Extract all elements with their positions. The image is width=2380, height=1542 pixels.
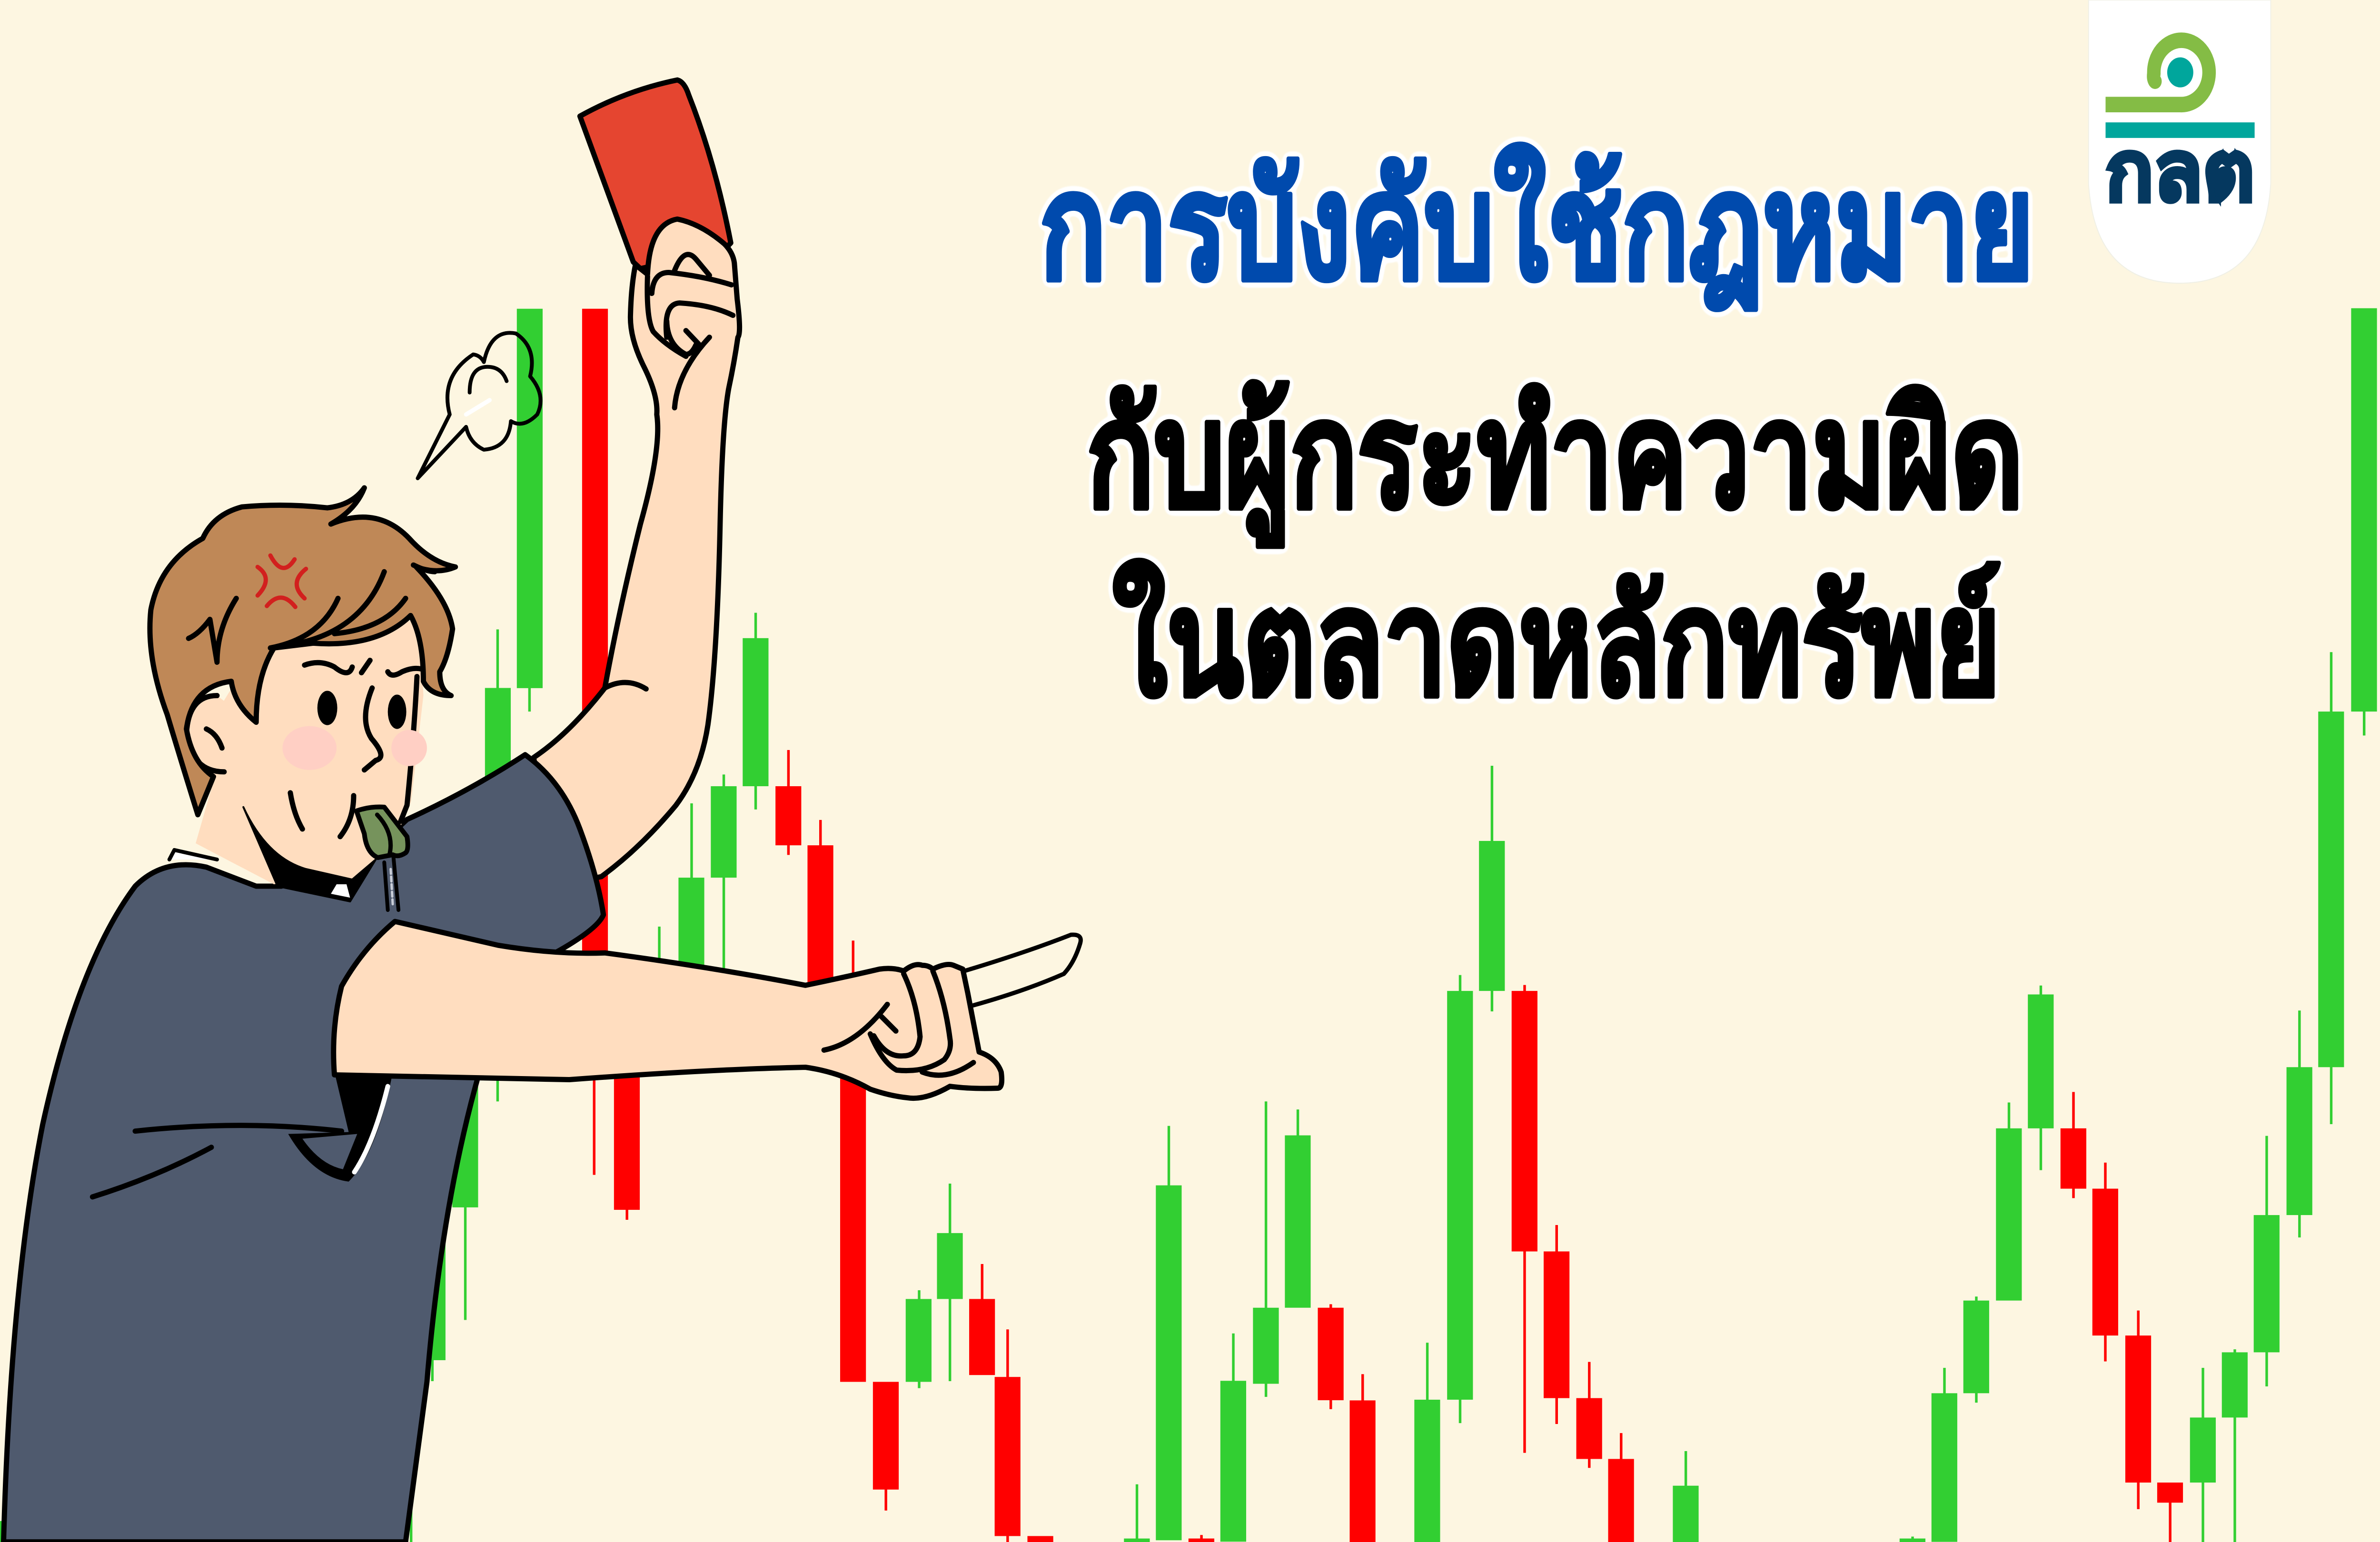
logo teal bar [2105, 122, 2255, 138]
raised arm and fist [534, 219, 740, 886]
neck and face [192, 619, 423, 884]
mouth lines [290, 793, 302, 829]
puff of breath [418, 333, 541, 478]
logo panel [2089, 0, 2271, 283]
logo spiral [2105, 40, 2209, 105]
whistle [357, 807, 408, 910]
cheeks [282, 726, 427, 770]
red card [580, 80, 731, 268]
shirt wrinkles [92, 1126, 342, 1197]
pointing finger [964, 935, 1081, 1005]
eyebrows [305, 660, 421, 675]
title line 1: การบังคับใช้กฎหมาย [1040, 143, 2034, 310]
collar [169, 850, 217, 860]
referee character [3, 80, 1081, 1542]
green candles [0, 308, 2377, 1542]
eyes [317, 691, 407, 729]
shirt [3, 755, 604, 1542]
hair strands [188, 565, 435, 662]
ear [187, 696, 242, 772]
chin shadow [243, 807, 376, 901]
pointing arm and hand [334, 921, 1002, 1098]
anger mark [258, 555, 306, 607]
nose [364, 688, 381, 770]
logo wordmark: กลต [2105, 124, 2255, 218]
head [150, 488, 456, 901]
title line 3: ในตลาดหลักทรัพย์ [1112, 559, 2001, 726]
hair [150, 488, 456, 815]
white badge [2089, 0, 2271, 283]
red candles [582, 309, 2183, 1542]
title line 2: กับผู้กระทำความผิด [1087, 374, 2023, 547]
candlestick chart [0, 308, 2377, 1542]
armhole under pointing arm [288, 1072, 393, 1182]
